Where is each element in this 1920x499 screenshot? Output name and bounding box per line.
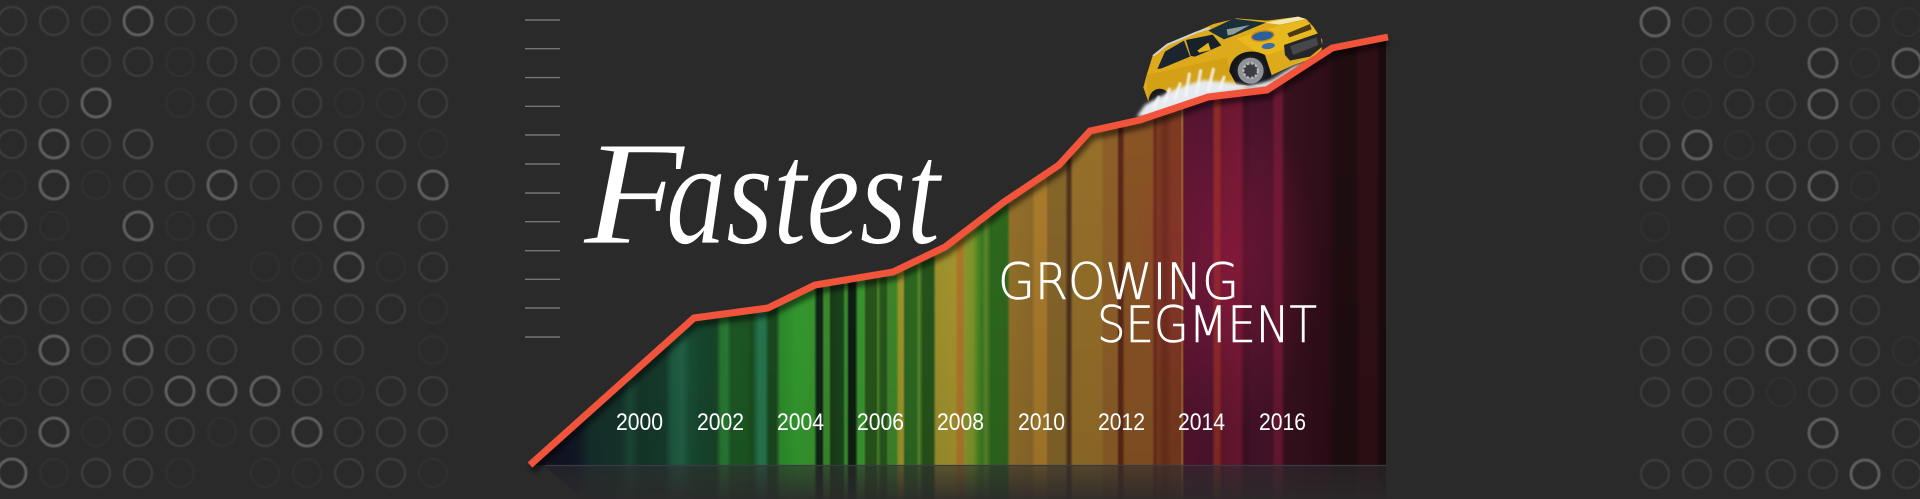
windshield	[1208, 19, 1266, 39]
subtitle line: SEGMENT: SEGMENT	[1097, 296, 1317, 354]
year axis labels: 2008	[937, 409, 984, 436]
windshield reflection	[1227, 25, 1250, 35]
line shadow	[532, 42, 1388, 470]
hood	[1237, 20, 1322, 55]
subtitle line: GROWING: GROWING	[998, 253, 1239, 311]
year axis labels: 2000	[616, 409, 663, 436]
bar chart: coloured year stripes under the line	[536, 41, 1386, 465]
hood edge highlight	[1265, 17, 1306, 25]
grille bumper	[1284, 33, 1322, 61]
mirror	[1197, 43, 1211, 53]
background pattern: right ring grid	[1641, 8, 1920, 488]
year axis labels: 2016	[1259, 409, 1306, 436]
y-axis tick marks	[525, 20, 560, 337]
background pattern: left ring grid	[0, 7, 447, 487]
title: Fastest	[583, 112, 943, 276]
title: Fastest: F	[583, 112, 686, 276]
rear side window	[1157, 41, 1190, 69]
splash streaks	[1154, 69, 1224, 107]
year axis labels: 2012	[1098, 409, 1145, 436]
car body	[1143, 17, 1322, 102]
year axis labels	[616, 409, 1306, 436]
year axis labels: 2004	[777, 409, 824, 436]
lower body shading	[1147, 57, 1232, 100]
front side window	[1186, 35, 1221, 57]
wheel spokes	[1243, 63, 1258, 78]
trend line	[530, 37, 1388, 465]
title: Fastest: astest	[666, 112, 943, 276]
fog light	[1261, 42, 1275, 50]
icon: yellow SUV splashing through water	[1137, 17, 1322, 117]
year axis labels: 2014	[1178, 409, 1225, 436]
water splash	[1137, 61, 1307, 117]
front stripe grille	[1287, 24, 1312, 37]
roof edge highlight	[1153, 28, 1210, 56]
front wheel	[1236, 56, 1265, 85]
year axis labels: 2002	[697, 409, 744, 436]
year axis labels: 2006	[857, 409, 904, 436]
reflection of stripes on the floor	[546, 466, 1386, 499]
year axis labels: 2010	[1018, 409, 1065, 436]
grille bars	[1290, 37, 1318, 55]
wheel arch	[1229, 51, 1272, 85]
floor line	[545, 464, 1386, 466]
headlight	[1251, 29, 1275, 43]
rear wheel arch	[1148, 89, 1172, 102]
